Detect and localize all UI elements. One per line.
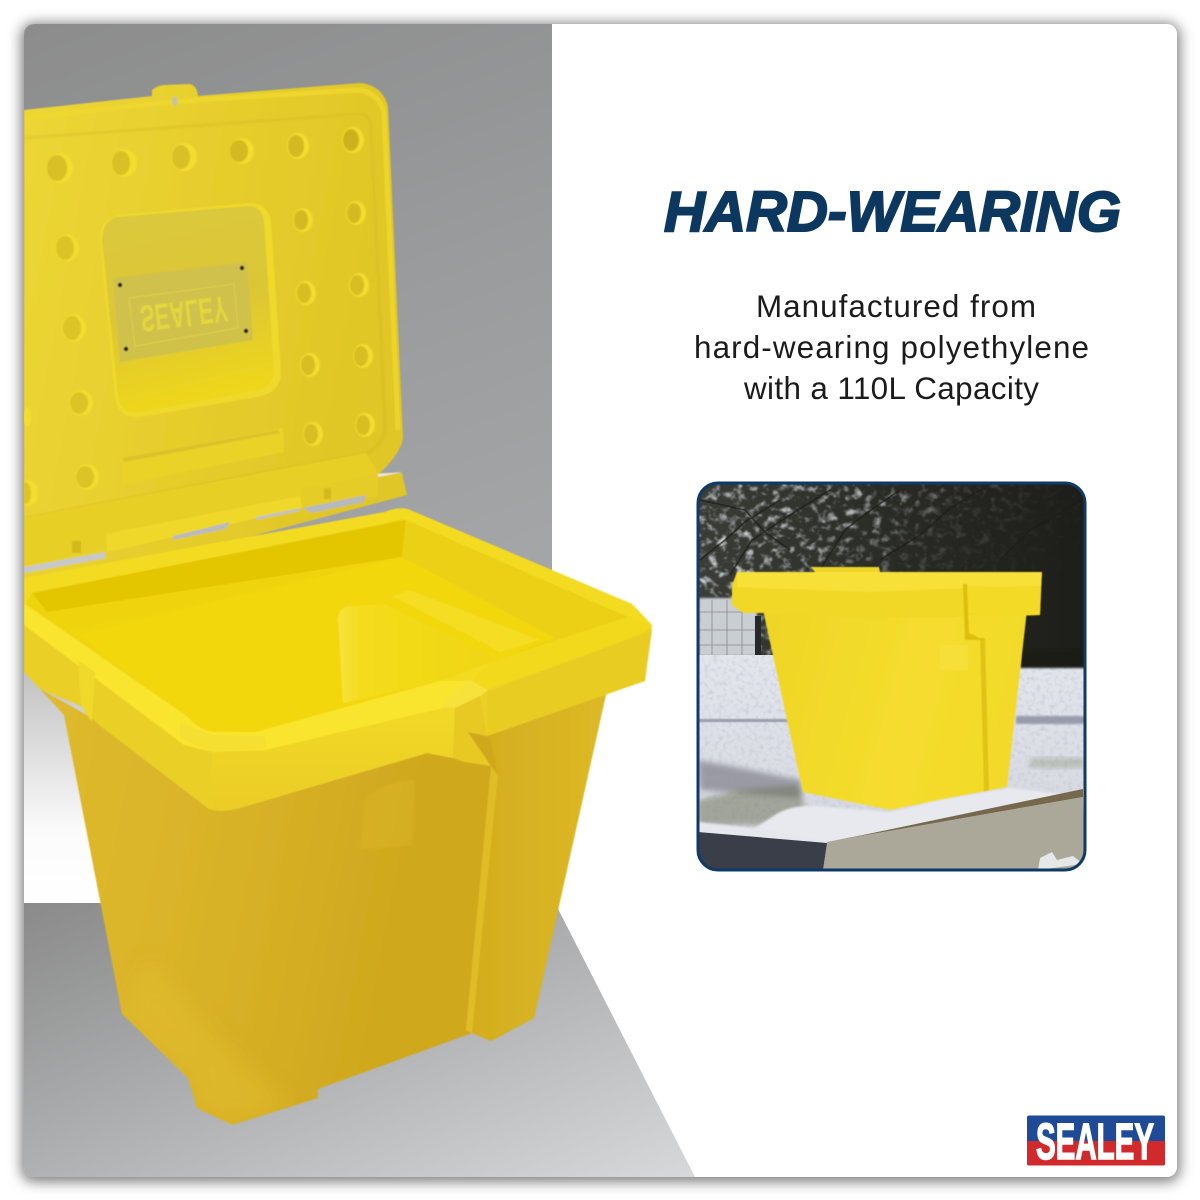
interior floor xyxy=(180,557,555,731)
lid recess xyxy=(100,203,281,417)
grey floor xyxy=(24,903,695,1177)
photo border xyxy=(698,483,1085,870)
inset photo: bin in snow xyxy=(698,483,1086,870)
heading: HARD-WEARING xyxy=(664,180,1121,244)
interior right ledge xyxy=(402,520,628,657)
rim front band xyxy=(436,708,454,711)
rim right lip xyxy=(486,654,576,689)
lid holes xyxy=(18,127,375,506)
body embossed label xyxy=(360,780,415,850)
photo bin xyxy=(732,567,1042,810)
interior well xyxy=(338,604,496,703)
interior back shadow xyxy=(32,520,406,612)
body lower foot highlight xyxy=(239,1084,244,1104)
lid instruction plate: SEALEY xyxy=(138,288,230,339)
rim front lip xyxy=(24,604,470,752)
lid inner border xyxy=(26,126,182,138)
description text: with a 110L Capacity xyxy=(743,371,1039,406)
lid hinge gaps xyxy=(24,552,106,573)
lid hinge strip xyxy=(24,453,378,566)
product: open yellow storage bin xyxy=(18,83,652,1125)
body groove xyxy=(466,766,498,1033)
bin body xyxy=(40,689,607,1125)
interior back wall xyxy=(26,520,555,730)
rim top surface xyxy=(24,508,652,752)
bin right panel xyxy=(472,690,607,1041)
bin rim xyxy=(24,508,652,811)
lid hasp hole xyxy=(172,96,178,106)
snow flecks on kerb xyxy=(1038,852,1083,870)
open lid xyxy=(18,83,407,590)
trees background xyxy=(700,484,1084,655)
rim left band xyxy=(24,672,81,706)
snow ground xyxy=(698,655,1085,845)
panel: product photo area xyxy=(18,24,695,1177)
lid long recess xyxy=(272,430,283,454)
snow clumps at bin base xyxy=(740,788,1062,848)
grass patches xyxy=(698,785,805,825)
description text: hard-wearing polyethylene xyxy=(694,330,1089,365)
backdrop glow xyxy=(24,672,87,820)
left low snow xyxy=(698,822,830,848)
concrete kerb xyxy=(823,797,1085,870)
lid top edge highlight xyxy=(24,90,398,430)
dark kerb xyxy=(698,832,827,870)
distant snow field and fence xyxy=(699,598,757,656)
description text xyxy=(694,289,1089,406)
tree branches xyxy=(700,490,1006,576)
kerb moss strip xyxy=(827,789,1083,842)
rim front clip xyxy=(440,680,488,708)
rim outer shape xyxy=(24,508,652,811)
description text: Manufactured from xyxy=(756,289,1036,324)
rim corner notches xyxy=(180,722,268,752)
far tree line on right xyxy=(1020,650,1086,668)
lid instruction plate xyxy=(113,262,253,362)
grey wall xyxy=(24,24,552,672)
